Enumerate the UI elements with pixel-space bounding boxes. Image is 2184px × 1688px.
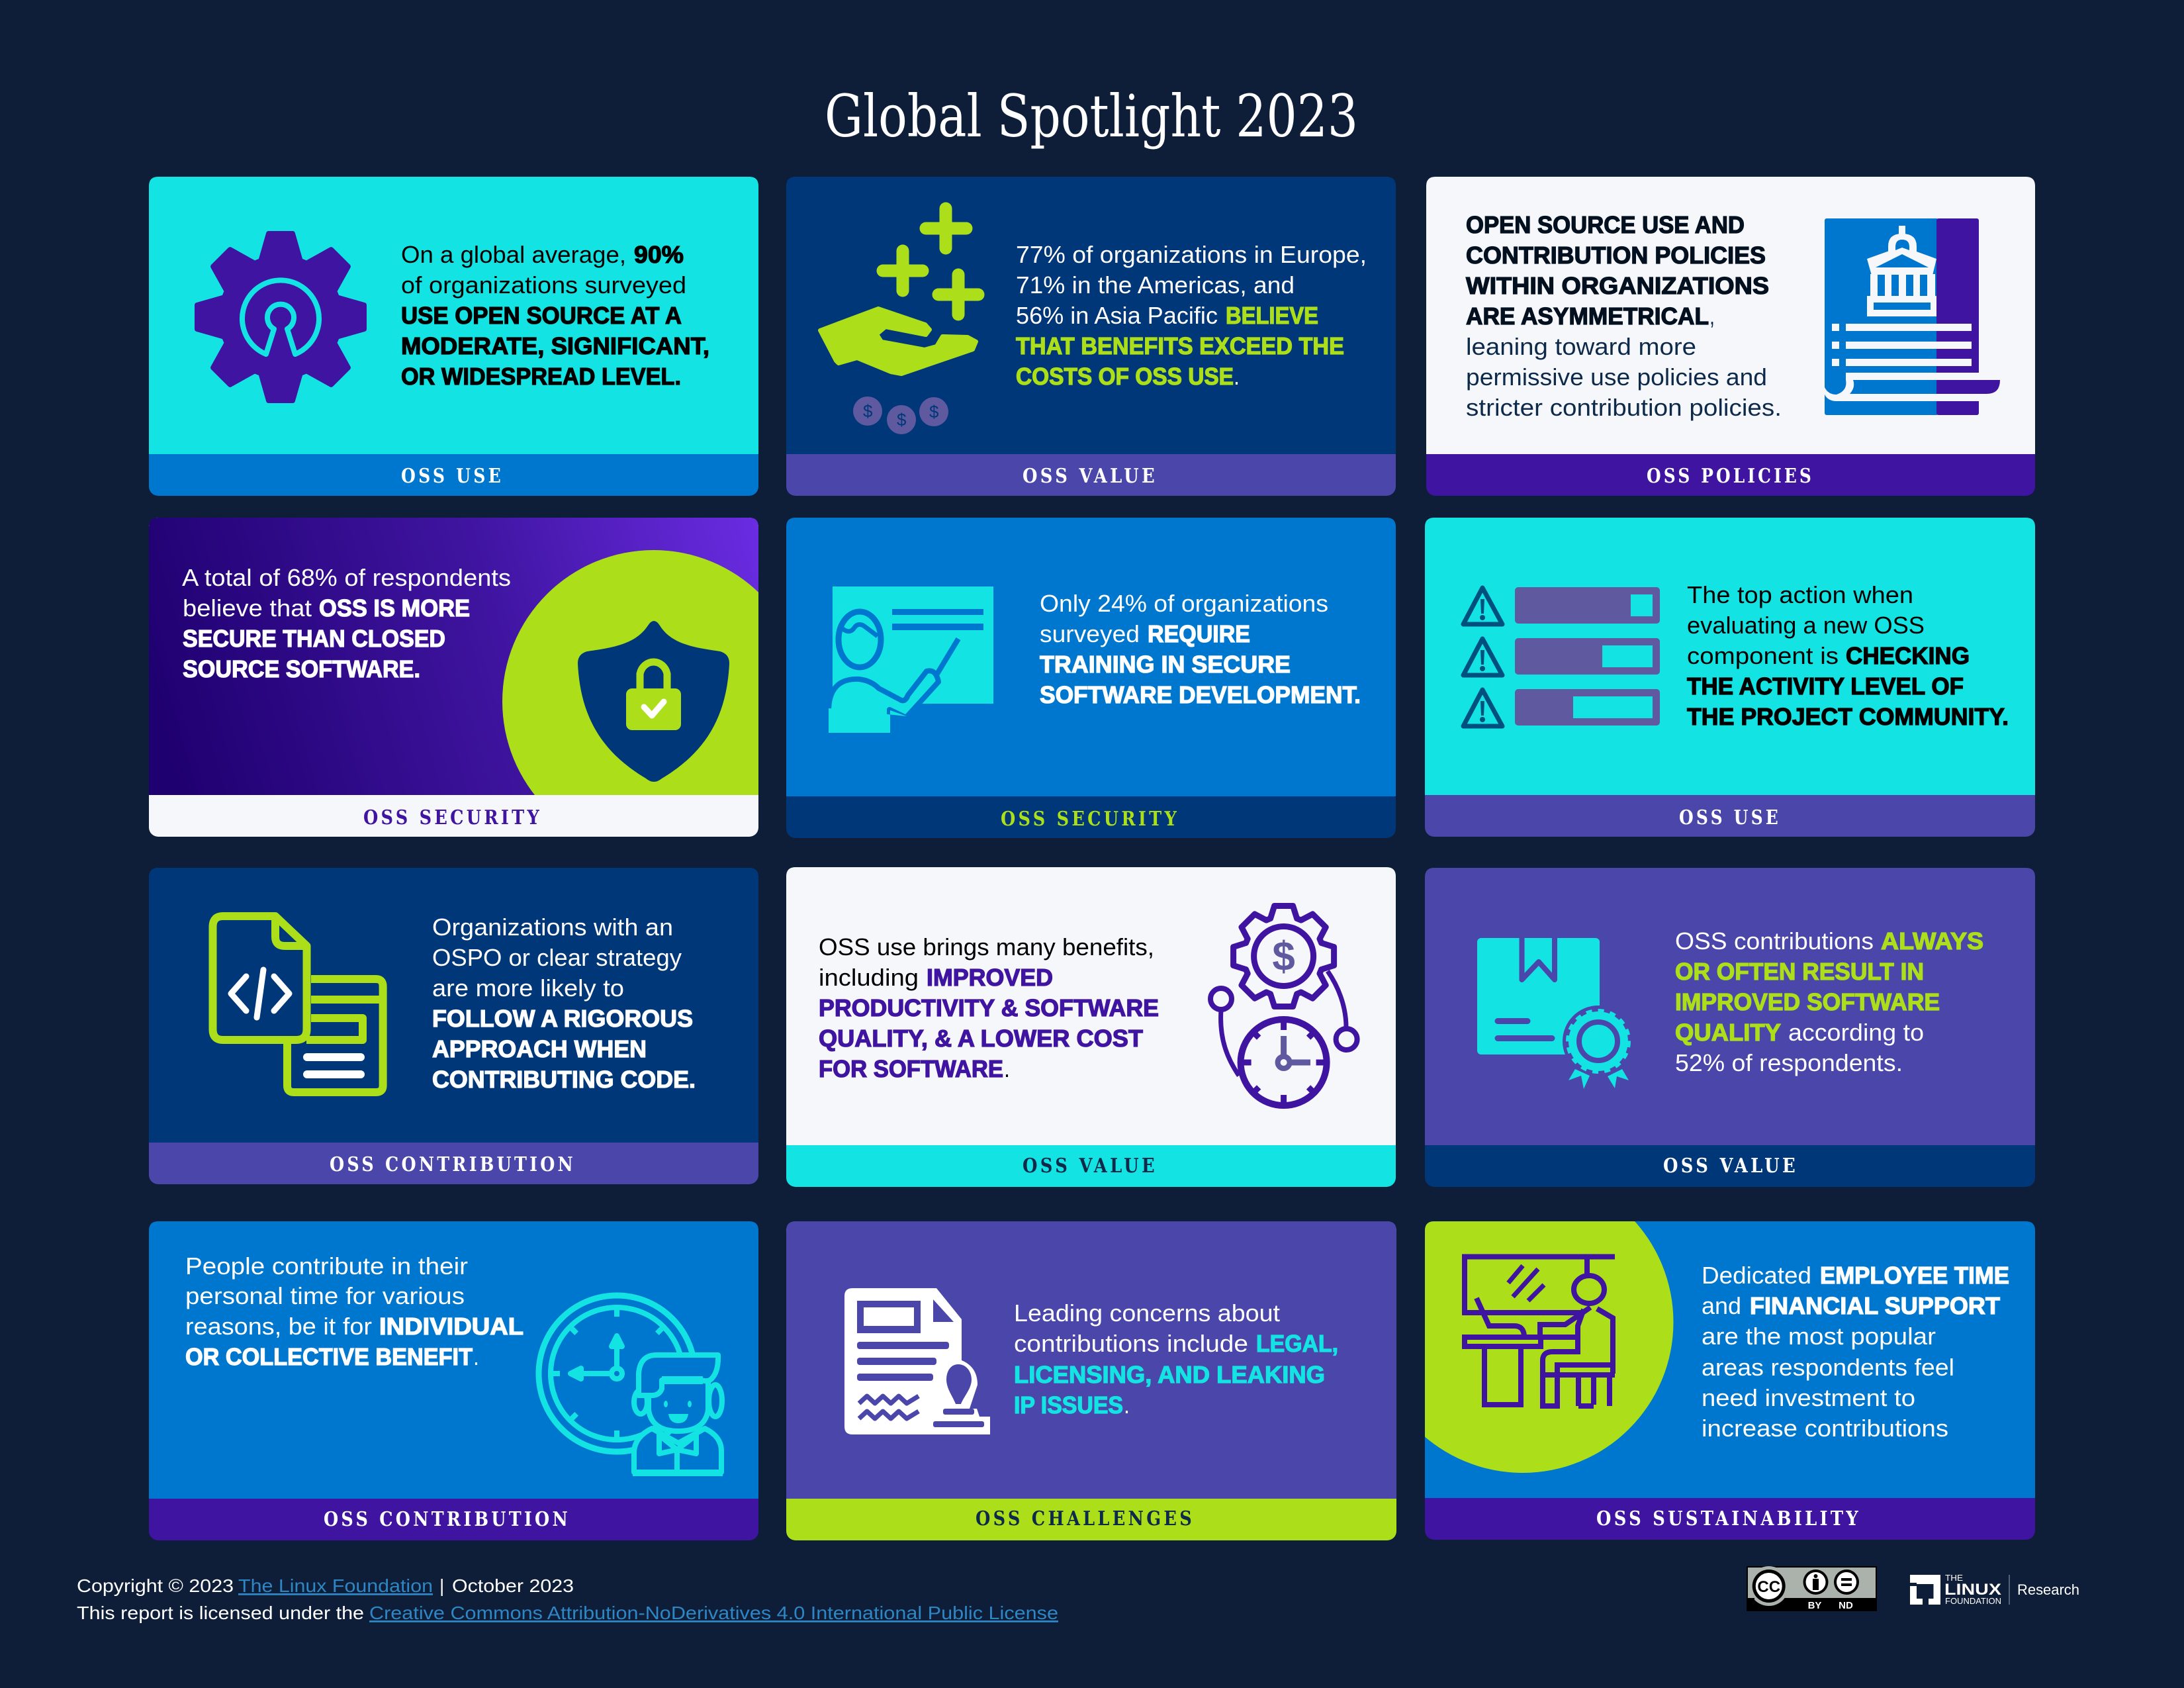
text block	[182, 564, 511, 682]
text block: reasons, be it for	[185, 1313, 372, 1340]
text block: .	[1124, 1391, 1130, 1419]
text block: BELIEVE	[1226, 302, 1318, 329]
text block: THE PROJECT COMMUNITY.	[1687, 703, 2009, 730]
icon: code documents	[213, 916, 383, 1092]
text block: People contribute in their	[185, 1252, 468, 1280]
text block: FOLLOW A RIGOROUS	[432, 1005, 693, 1032]
text block: of organizations surveyed	[401, 271, 686, 299]
text block: ALWAYS	[1881, 927, 1983, 955]
text block: QUALITY	[1675, 1019, 1781, 1046]
text block: SOURCE SOFTWARE.	[183, 655, 420, 682]
band label: OSS POLICIES	[1647, 465, 1814, 488]
icon: open source gear	[197, 234, 364, 400]
icon: Linux Foundation Research logo: THE	[1945, 1573, 1963, 1583]
text block: SOFTWARE DEVELOPMENT.	[1040, 681, 1361, 708]
icon: Creative Commons BY-ND badge: CC	[1757, 1578, 1780, 1596]
panel: OSS value contributions	[1425, 868, 2035, 1187]
icon: hand with plus signs and coins	[820, 209, 978, 434]
icon: legal document with stamp	[844, 1288, 990, 1434]
text block: EMPLOYEE TIME	[1820, 1262, 2009, 1289]
text block: 90%	[634, 241, 684, 268]
text block: .	[473, 1343, 479, 1370]
band label: OSS USE	[1679, 806, 1781, 829]
text block: .	[1004, 1055, 1010, 1082]
band label: OSS CONTRIBUTION	[330, 1153, 576, 1176]
footer: copyright and license: Copyright © 2023	[77, 1575, 234, 1596]
text block: THE ACTIVITY LEVEL OF	[1687, 673, 1964, 700]
text block: according to	[1788, 1019, 1924, 1046]
text block: REQUIRE	[1148, 620, 1250, 647]
band label: OSS VALUE	[1023, 465, 1158, 488]
text block: increase contributions	[1702, 1415, 1948, 1442]
text block: Organizations with an	[432, 914, 673, 941]
text block: LICENSING, AND LEAKING	[1014, 1361, 1325, 1388]
text block: stricter contribution policies.	[1466, 394, 1782, 421]
panel: OSS policies	[1426, 177, 2035, 496]
text block: OSPO or clear strategy	[432, 944, 682, 971]
text block: CONTRIBUTING CODE.	[432, 1066, 696, 1093]
text block: The top action when	[1687, 581, 1913, 608]
text block: INDIVIDUAL	[379, 1313, 523, 1340]
text block: permissive use policies and	[1466, 363, 1767, 391]
icon: Linux Foundation Research logo: FOUNDATION	[1945, 1596, 2001, 1606]
text block: IP ISSUES	[1014, 1391, 1123, 1419]
text block: FOR SOFTWARE	[819, 1055, 1003, 1082]
text block: contributions include	[1014, 1330, 1248, 1357]
panel: OSS use activity level	[1425, 518, 2035, 837]
panel: OSS use 90 percent	[149, 177, 758, 496]
text block: Dedicated	[1702, 1262, 1811, 1289]
text block: FINANCIAL SUPPORT	[1750, 1292, 2000, 1319]
text block: 56% in Asia Pacific	[1016, 302, 1218, 329]
band label: OSS CONTRIBUTION	[324, 1508, 570, 1531]
text block: APPROACH WHEN	[432, 1035, 647, 1062]
icon: shield with lock	[578, 621, 729, 782]
text block: including	[819, 964, 919, 991]
panel: OSS value productivity	[786, 867, 1396, 1187]
text block: CONTRIBUTION POLICIES	[1466, 242, 1766, 269]
text block: Leading concerns about	[1014, 1299, 1280, 1327]
icon: gear and clock: $	[1272, 934, 1295, 980]
text block: OPEN SOURCE USE AND	[1466, 211, 1745, 238]
footer: copyright and license: |	[439, 1575, 444, 1596]
text block: and	[1702, 1292, 1741, 1319]
text block: QUALITY, & A LOWER COST	[819, 1025, 1143, 1052]
text block: PRODUCTIVITY & SOFTWARE	[819, 994, 1159, 1021]
text block: OR OFTEN RESULT IN	[1675, 958, 1924, 985]
text block: OR WIDESPREAD LEVEL.	[401, 363, 681, 390]
panel: OSS contribution OSPO	[149, 868, 758, 1184]
text block: IMPROVED SOFTWARE	[1675, 988, 1940, 1015]
text block: ARE ASYMMETRICAL	[1466, 303, 1709, 330]
footer: copyright and license: October 2023	[452, 1575, 574, 1596]
text block: IMPROVED	[927, 964, 1053, 991]
text block: A total of 68% of respondents	[182, 564, 511, 591]
text block: evaluating a new OSS	[1687, 612, 1925, 639]
text block: THAT BENEFITS EXCEED THE	[1016, 332, 1344, 359]
icon: warning triangles and meters	[1463, 587, 1660, 726]
lime circle	[1425, 1221, 1673, 1473]
text block: USE OPEN SOURCE AT A	[401, 302, 682, 329]
text block: surveyed	[1040, 620, 1140, 647]
text block: OSS use brings many benefits,	[819, 933, 1154, 961]
icon: Creative Commons BY-ND badge	[1747, 1566, 1877, 1611]
text block	[1687, 581, 2009, 730]
band label: OSS SUSTAINABILITY	[1596, 1507, 1861, 1530]
text block: OR COLLECTIVE BENEFIT	[185, 1343, 473, 1370]
text block: 77% of organizations in Europe,	[1016, 241, 1367, 268]
icon: Linux Foundation Research logo	[1910, 1573, 2079, 1606]
text block	[819, 933, 1159, 1082]
icon: person at desk	[1465, 1256, 1615, 1406]
icon: Creative Commons BY-ND badge: BY	[1808, 1600, 1821, 1611]
footer: copyright and license: The Linux Foundation	[238, 1575, 433, 1596]
band label: OSS USE	[401, 465, 504, 488]
text block: 71% in the Americas, and	[1016, 271, 1295, 299]
footer: copyright and license: Creative Commons Attribution-NoDerivatives 4.0 International Public License	[369, 1603, 1058, 1623]
text block: COSTS OF OSS USE	[1016, 363, 1234, 390]
text block: OSS contributions	[1675, 927, 1874, 955]
icon: Linux Foundation Research logo: LINUX	[1944, 1581, 2001, 1599]
panel: OSS challenges	[786, 1221, 1396, 1540]
text block	[185, 1252, 523, 1370]
text block: are the most popular	[1702, 1323, 1936, 1350]
text block: areas respondents feel	[1702, 1354, 1954, 1381]
text block: SECURE THAN CLOSED	[183, 625, 445, 652]
text block: Only 24% of organizations	[1040, 590, 1328, 617]
text block	[1466, 211, 1782, 421]
text block: ,	[1709, 303, 1715, 330]
lime circle	[502, 550, 758, 795]
panel: OSS security 68 percent	[149, 518, 758, 837]
text block	[1675, 927, 1983, 1076]
text block: MODERATE, SIGNIFICANT,	[401, 332, 709, 359]
icon: Linux Foundation Research logo: Research	[2017, 1581, 2079, 1598]
text block: leaning toward more	[1466, 333, 1696, 360]
text block: .	[1234, 363, 1240, 390]
icon: hand with plus signs and coins: $	[863, 401, 873, 421]
text block: personal time for various	[185, 1282, 465, 1309]
text block	[1014, 1299, 1338, 1419]
footer: copyright and license	[77, 1575, 1058, 1623]
text block: are more likely to	[432, 974, 624, 1002]
band label: OSS SECURITY	[363, 806, 542, 829]
band label: OSS CHALLENGES	[976, 1507, 1195, 1530]
text block: WITHIN ORGANIZATIONS	[1466, 272, 1769, 299]
text block	[432, 914, 696, 1093]
text block: component is	[1687, 642, 1839, 669]
text block: LEGAL,	[1256, 1330, 1338, 1357]
icon: Creative Commons BY-ND badge: ND	[1839, 1600, 1853, 1611]
text block: TRAINING IN SECURE	[1040, 651, 1291, 678]
icon: clock and person	[539, 1295, 723, 1474]
text block: believe that	[183, 594, 312, 622]
text block: need investment to	[1702, 1384, 1915, 1411]
icon: package with rosette	[1477, 938, 1634, 1089]
icon: gear and clock	[1210, 906, 1357, 1105]
footer: copyright and license: This report is licensed under the	[77, 1603, 364, 1623]
icon: hand with plus signs and coins: $	[929, 402, 939, 422]
panel: OSS value benefits	[786, 177, 1396, 496]
text block: OSS IS MORE	[319, 594, 470, 622]
text block: 52% of respondents.	[1675, 1049, 1903, 1076]
panel: OSS sustainability	[1425, 1221, 2035, 1540]
text block: CHECKING	[1846, 642, 1970, 669]
band label: OSS VALUE	[1663, 1154, 1798, 1178]
text block	[1040, 590, 1361, 708]
title: Global Spotlight 2023	[825, 82, 1358, 150]
icon: policy document with building	[1825, 218, 2000, 415]
band label: OSS SECURITY	[1001, 808, 1179, 831]
icon: hand with plus signs and coins: $	[897, 410, 907, 430]
band label: OSS VALUE	[1023, 1154, 1158, 1178]
text block	[1702, 1262, 2009, 1442]
text block	[1016, 241, 1367, 390]
icon: presenter at board	[829, 586, 993, 733]
panel: OSS contribution personal time	[149, 1221, 758, 1540]
text block	[401, 241, 709, 390]
panel: OSS security training	[786, 518, 1396, 838]
text block: On a global average,	[401, 241, 626, 268]
